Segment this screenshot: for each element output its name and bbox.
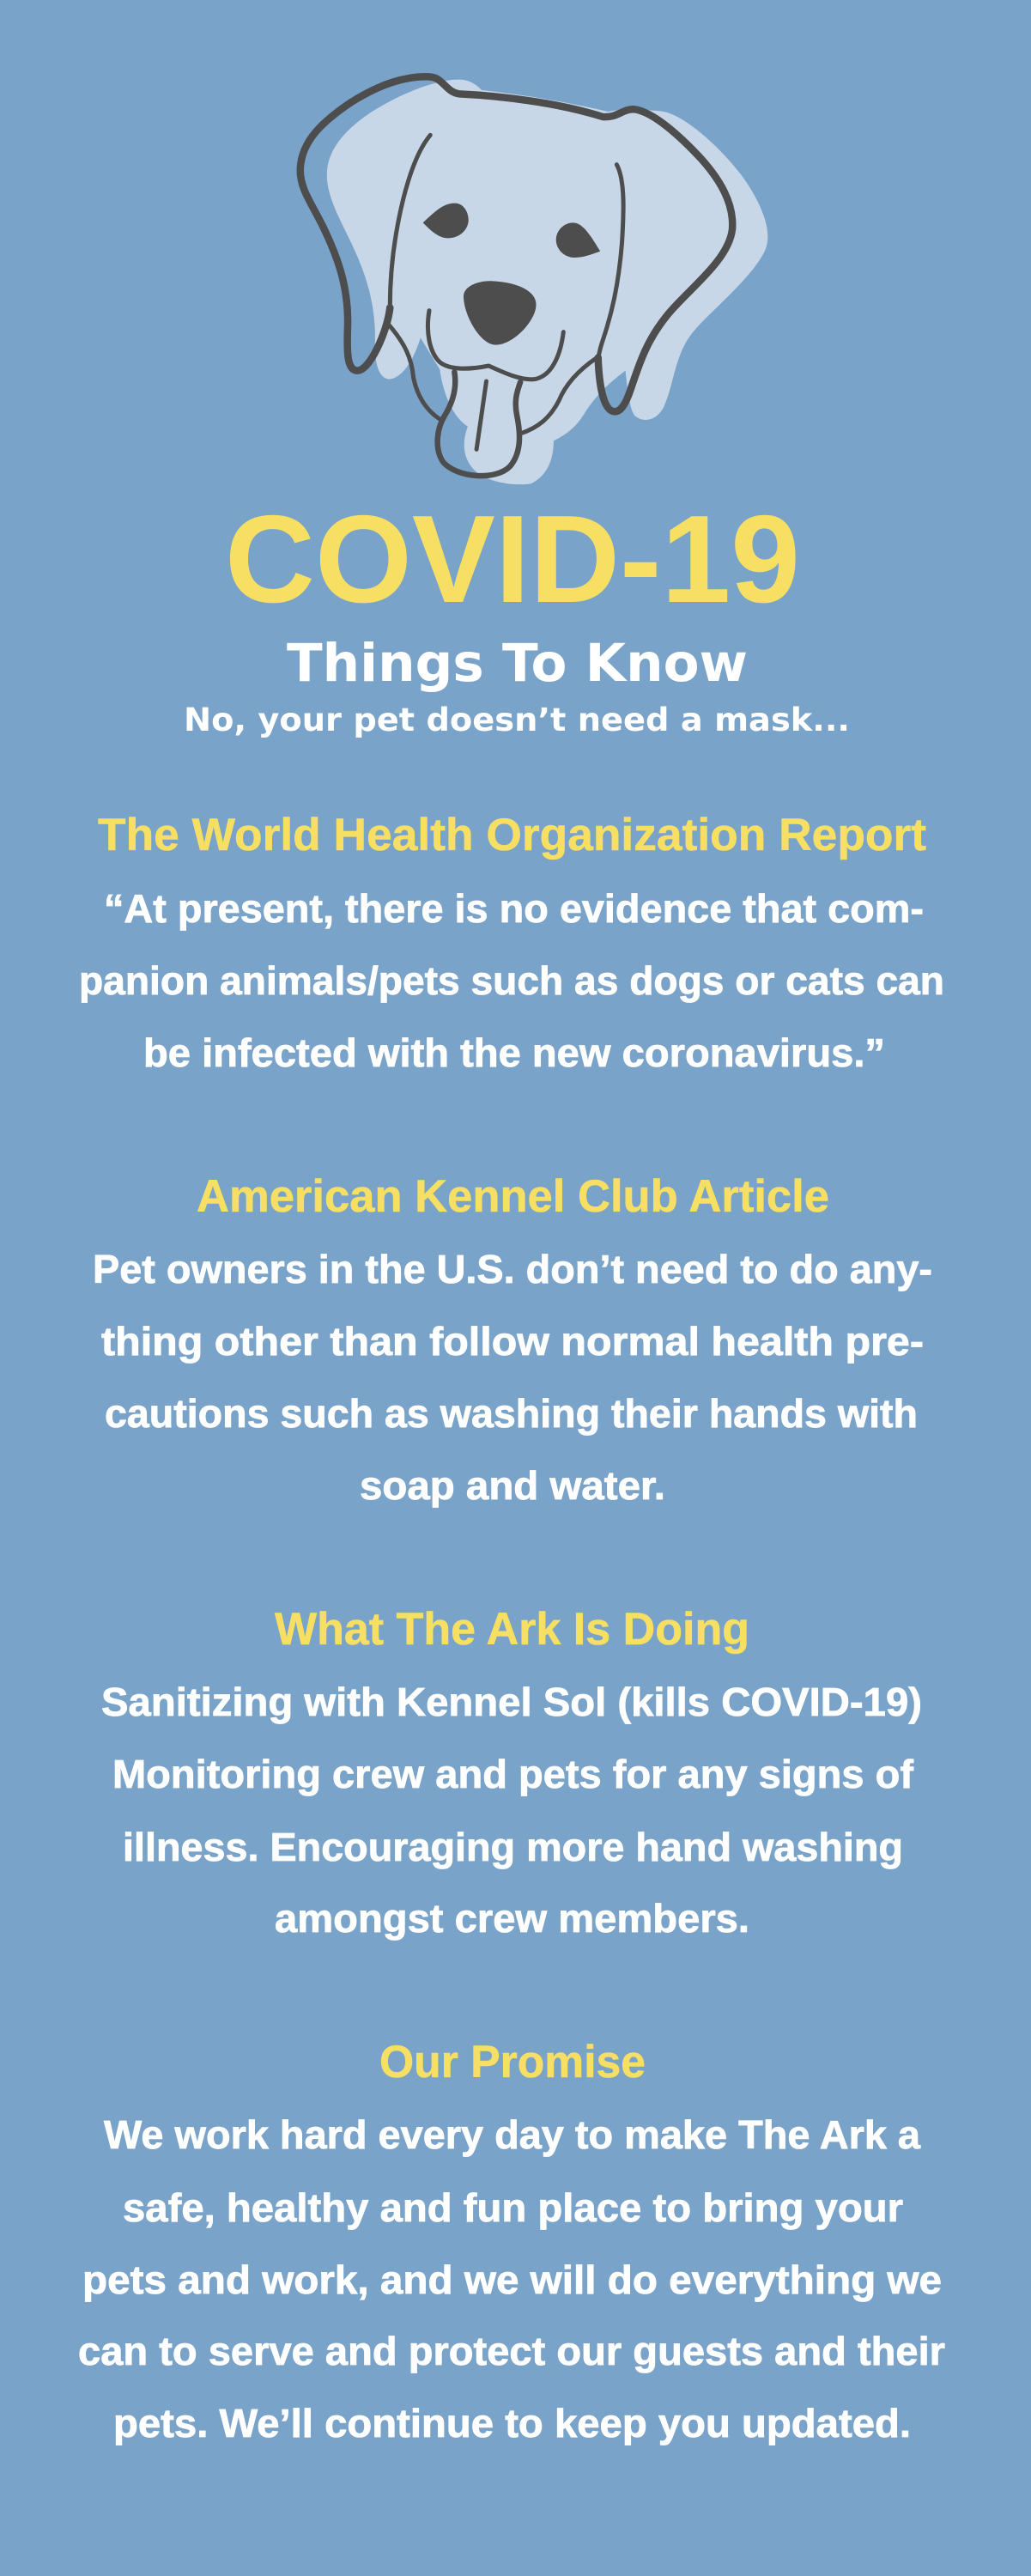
section: Our Promise (78, 2037, 945, 2445)
body text: illness. Encouraging more hand washing (123, 1825, 903, 1869)
heading: What The Ark Is Doing (275, 1604, 749, 1655)
heading: American Kennel Club Article (197, 1171, 829, 1222)
dog tongue (438, 372, 520, 476)
heading: Our Promise (379, 2037, 646, 2087)
body text: “At present, there is no evidence that com- (104, 886, 924, 931)
section: What The Ark Is Doing (101, 1604, 922, 1941)
dog right eye (556, 222, 600, 258)
dog outline (300, 76, 732, 411)
body text (101, 1680, 922, 1941)
icon: dog head (300, 76, 767, 484)
body text: panion animals/pets such as dogs or cats can (79, 958, 944, 1003)
dog nose (464, 281, 536, 345)
body text (78, 2112, 945, 2445)
body text: pets. We’ll continue to keep you updated. (113, 2401, 911, 2445)
body text (79, 886, 944, 1075)
body text: Pet owners in the U.S. don’t need to do any- (93, 1247, 932, 1291)
subtitle: Things To Know (287, 633, 748, 694)
body text: amongst crew members. (275, 1896, 749, 1941)
body text (93, 1247, 932, 1508)
body text: Monitoring crew and pets for any signs of (112, 1752, 914, 1796)
body text: We work hard every day to make The Ark a (104, 2112, 920, 2157)
body text: can to serve and protect our guests and their (78, 2329, 945, 2373)
body text: thing other than follow normal health pre- (101, 1319, 924, 1364)
title: COVID-19 (225, 489, 800, 629)
body text: be infected with the new coronavirus.” (143, 1030, 885, 1075)
dog light fill shape (327, 80, 767, 484)
body text: cautions such as washing their hands with (105, 1391, 918, 1436)
body text: Sanitizing with Kennel Sol (kills COVID-19) (101, 1680, 922, 1724)
tagline: No, your pet doesn’t need a mask... (184, 702, 850, 738)
dog face lines (389, 135, 623, 449)
section: World Health Organization (79, 810, 944, 1075)
dog left eye (423, 204, 469, 238)
body text: pets and work, and we will do everything we (82, 2257, 942, 2302)
heading: The World Health Organization Report (98, 810, 926, 860)
body text: soap and water. (360, 1463, 665, 1508)
section: American Kennel Club (93, 1171, 932, 1508)
body text: safe, healthy and fun place to bring your (123, 2185, 903, 2230)
